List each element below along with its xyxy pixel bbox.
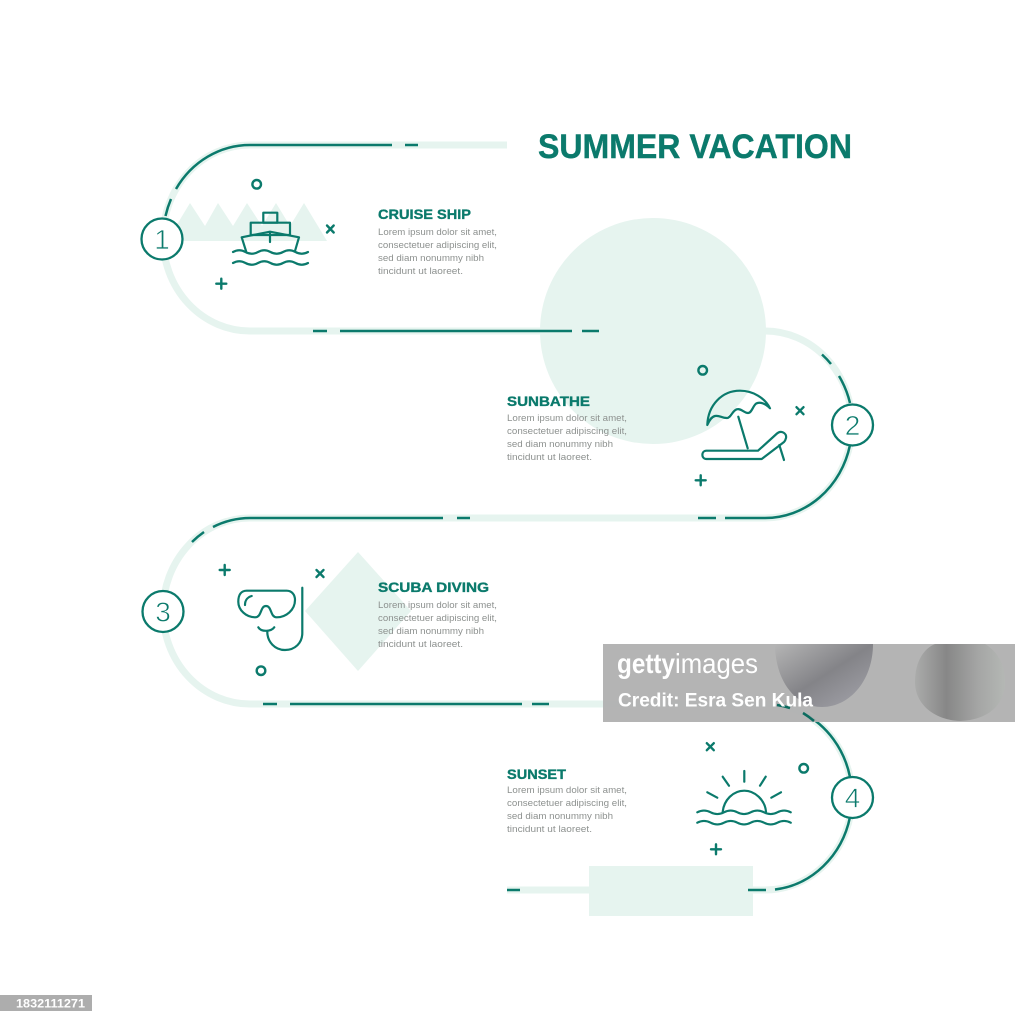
winding route: pale track: [163, 145, 852, 890]
decorative shape: large circle: [540, 218, 766, 444]
step 4: small markers: [707, 743, 808, 854]
step 4: text block: [507, 766, 627, 834]
step 3: snorkel mask icon: [238, 588, 302, 650]
step 4: number badge: 4: [845, 782, 860, 814]
step 1: small markers: [216, 180, 334, 289]
winding route: dark segments: [166, 145, 850, 890]
step 1: text block: [378, 206, 497, 276]
step 1: text block: tincidunt ut laoreet.: [378, 266, 463, 276]
step 2: text block: sed diam nonummy nibh: [507, 439, 613, 449]
step 4: sunset over water icon: [697, 771, 791, 824]
step 1: text block: CRUISE SHIP: [378, 206, 471, 222]
step 2: text block: tincidunt ut laoreet.: [507, 452, 592, 462]
step 2: small markers: [696, 366, 804, 485]
image id stamp: 1832111271: [16, 998, 86, 1010]
step 4: text block: consectetuer adipiscing elit,: [507, 798, 627, 808]
step 2: beach umbrella and lounger icon: [702, 391, 786, 460]
step 3: text block: sed diam nonummy nibh: [378, 626, 484, 636]
decorative shape: mountains: [167, 203, 327, 241]
step 3: text block: Lorem ipsum dolor sit amet,: [378, 600, 497, 610]
step 3: text block: SCUBA DIVING: [378, 579, 489, 595]
decorative shape: rectangle: [589, 866, 753, 916]
step 3: small markers: [220, 565, 324, 675]
step 4: number badge: [832, 777, 873, 818]
title: SUMMER VACATION: [538, 128, 852, 166]
step 1: text block: Lorem ipsum dolor sit amet,: [378, 227, 497, 237]
step 2: text block: SUNBATHE: [507, 393, 590, 409]
watermark banner: [603, 644, 1015, 722]
watermark banner: getty: [617, 648, 675, 679]
step 3: text block: tincidunt ut laoreet.: [378, 639, 463, 649]
step 1: number badge: [142, 218, 182, 260]
step 3: text block: [378, 579, 497, 649]
step 3: text block: consectetuer adipiscing elit,: [378, 613, 497, 623]
watermark banner: Credit: Esra Sen Kula: [618, 690, 813, 712]
decorative shape: diamond: [305, 552, 411, 671]
step 1: number badge: 1: [154, 224, 170, 255]
step 2: text block: [507, 393, 627, 462]
step 2: text block: consectetuer adipiscing elit,: [507, 426, 627, 436]
step 1: text block: sed diam nonummy nibh: [378, 253, 484, 263]
step 3: number badge: [142, 591, 184, 632]
step 2: number badge: 2: [845, 410, 860, 441]
step 1: text block: consectetuer adipiscing elit,: [378, 240, 497, 250]
step 4: text block: SUNSET: [507, 766, 566, 782]
step 3: number badge: 3: [155, 596, 171, 628]
step 1: cruise ship icon: [233, 213, 308, 265]
watermark banner: images: [675, 648, 758, 679]
step 2: text block: Lorem ipsum dolor sit amet,: [507, 413, 627, 423]
step 4: text block: sed diam nonummy nibh: [507, 811, 613, 821]
image id stamp: [0, 995, 92, 1011]
step 2: number badge: [832, 404, 873, 446]
step 4: text block: tincidunt ut laoreet.: [507, 824, 592, 834]
step 4: text block: Lorem ipsum dolor sit amet,: [507, 785, 627, 795]
